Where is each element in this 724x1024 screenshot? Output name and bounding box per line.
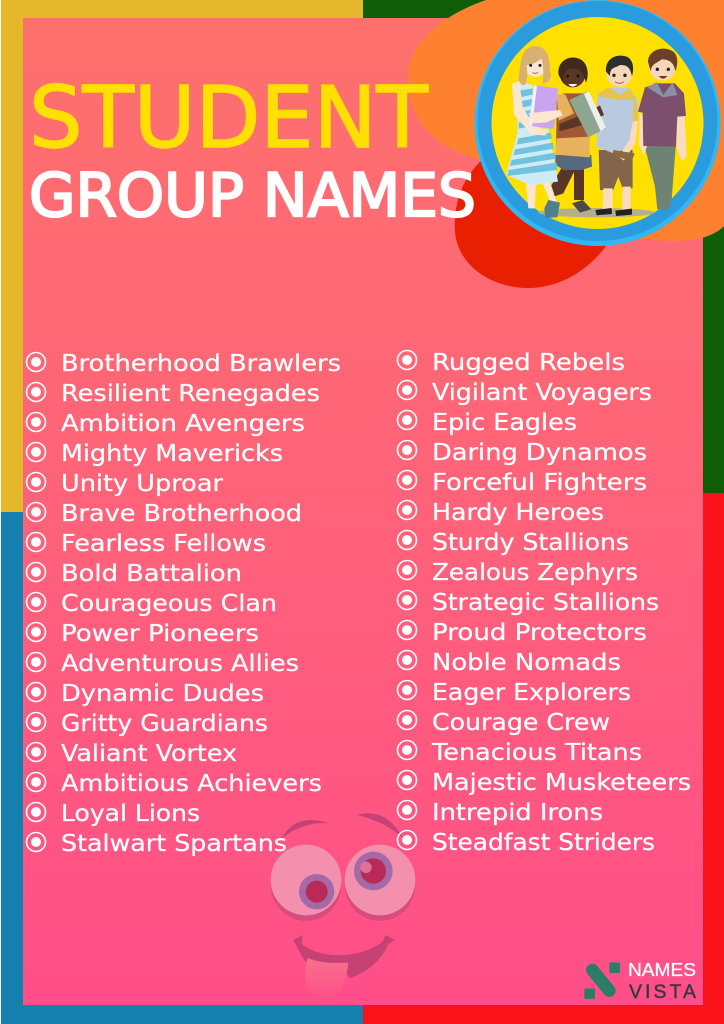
names right: Forceful Fighters <box>432 468 647 496</box>
names left: Valiant Vortex <box>61 739 237 767</box>
logo mark <box>584 962 620 999</box>
background: blue quadrant <box>1 512 363 1024</box>
blob: red <box>455 150 606 288</box>
illustration: pink cartoon face <box>271 813 415 1000</box>
bullets right <box>398 350 416 850</box>
names right: Sturdy Stallions <box>432 528 629 556</box>
names left: Bold Battalion <box>61 559 242 587</box>
logo text vista: VISTA <box>629 981 696 1003</box>
names left: Dynamic Dudes <box>61 679 264 707</box>
names right: Vigilant Voyagers <box>432 378 652 406</box>
names right: Rugged Rebels <box>432 348 625 376</box>
list: right column <box>398 348 691 856</box>
illustration: four students <box>506 46 687 218</box>
names right <box>431 348 691 856</box>
names right: Zealous Zephyrs <box>432 558 638 586</box>
names left: Resilient Renegades <box>61 379 320 407</box>
names left: Ambition Avengers <box>61 409 305 437</box>
student 1 <box>506 46 563 218</box>
names left: Fearless Fellows <box>61 529 266 557</box>
title: group names: GROUP NAMES <box>29 161 476 231</box>
title: student: STUDENT <box>29 69 429 168</box>
names left <box>61 349 341 857</box>
names right: Eager Explorers <box>432 678 631 706</box>
logo text names: NAMES <box>628 960 696 980</box>
names right: Majestic Musketeers <box>432 768 691 796</box>
names right: Noble Nomads <box>432 648 621 676</box>
bullet dots left <box>31 357 41 847</box>
names left: Unity Uproar <box>61 469 223 497</box>
student 2 <box>548 57 606 213</box>
eyebrows <box>282 813 403 838</box>
names right: Daring Dynamos <box>432 438 647 466</box>
names left: Gritty Guardians <box>61 709 268 737</box>
bullet dots right <box>402 355 412 845</box>
background: yellow quadrant <box>1 0 363 512</box>
names left: Ambitious Achievers <box>61 769 322 797</box>
names right: Tenacious Titans <box>431 738 642 766</box>
names left: Adventurous Allies <box>61 649 299 677</box>
names right: Strategic Stallions <box>432 588 659 616</box>
student 3 <box>595 56 639 216</box>
names left: Brave Brotherhood <box>61 499 302 527</box>
blob: orange <box>408 0 724 241</box>
mouth <box>293 935 395 978</box>
names right: Hardy Heroes <box>432 498 604 526</box>
names left: Stalwart Spartans <box>61 829 287 857</box>
names right: Intrepid Irons <box>432 798 603 826</box>
badge: students illustration <box>474 0 720 246</box>
left eye <box>271 845 341 921</box>
right eye <box>345 845 415 921</box>
names left: Mighty Mavericks <box>61 439 283 467</box>
names left: Power Pioneers <box>61 619 259 647</box>
background: red quadrant <box>363 493 724 1024</box>
names left: Courageous Clan <box>61 589 277 617</box>
background: green quadrant <box>363 0 724 493</box>
names left: Brotherhood Brawlers <box>61 349 341 377</box>
names right: Steadfast Striders <box>432 828 655 856</box>
logo: names vista <box>584 960 696 1003</box>
names left: Loyal Lions <box>61 799 200 827</box>
names right: Proud Protectors <box>432 618 647 646</box>
student 4 <box>638 49 687 209</box>
bullets left <box>26 352 46 852</box>
names right: Courage Crew <box>432 708 610 736</box>
list: left column <box>26 349 341 857</box>
names right: Epic Eagles <box>432 408 577 436</box>
tongue <box>305 958 348 1000</box>
